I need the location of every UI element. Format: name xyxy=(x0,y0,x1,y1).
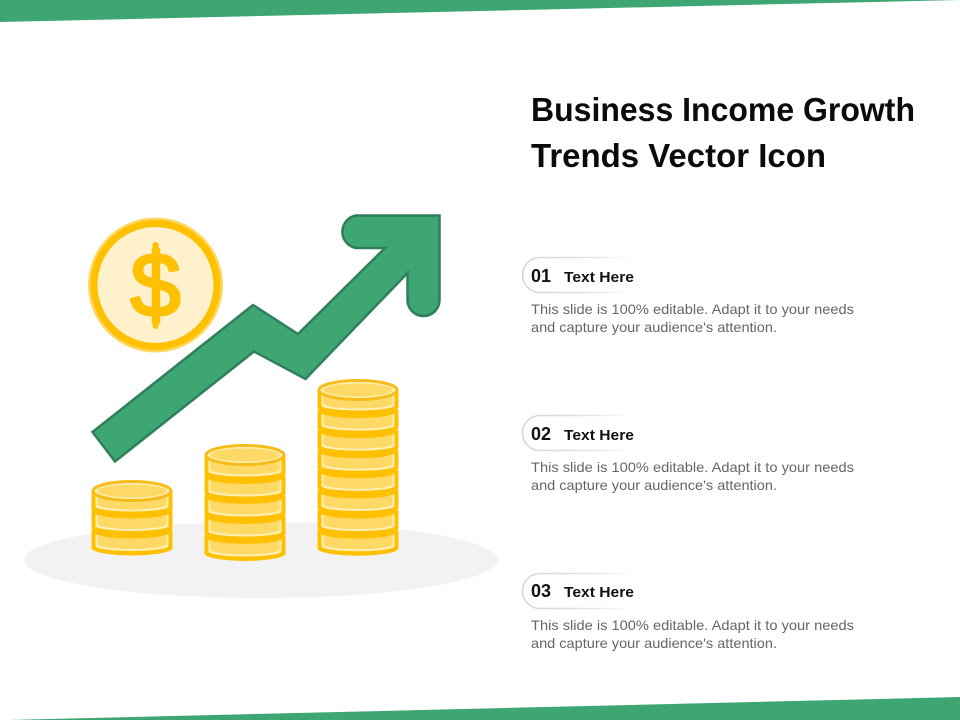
item 03: This slide is 100% editable. Adapt it to your needs xyxy=(531,617,854,633)
item 02 xyxy=(522,416,854,493)
item 01 xyxy=(523,258,854,335)
item 01: 01 xyxy=(531,266,551,286)
floor shadow xyxy=(24,522,498,598)
item 03 xyxy=(522,574,854,651)
item 02: Text Here xyxy=(564,428,634,444)
title: Business Income Growth xyxy=(531,91,915,128)
title: Trends Vector Icon xyxy=(531,137,826,174)
title xyxy=(531,91,915,174)
bottom green band xyxy=(8,697,960,720)
item 01: This slide is 100% editable. Adapt it to your needs xyxy=(531,301,854,317)
item 03: Text Here xyxy=(564,585,634,601)
item 02: 02 xyxy=(531,424,551,444)
icon: dollar coin: $ xyxy=(130,236,181,336)
item 03: and capture your audience's attention. xyxy=(531,635,777,651)
item 01: and capture your audience's attention. xyxy=(531,319,777,335)
item 01: Text Here xyxy=(564,270,634,286)
coin stack: large xyxy=(318,380,398,556)
arrow: rising trend xyxy=(92,216,440,462)
item 03: 03 xyxy=(531,581,551,601)
coin stack: medium xyxy=(204,446,286,561)
item 02: This slide is 100% editable. Adapt it to your needs xyxy=(531,459,854,475)
top green band xyxy=(0,0,960,22)
item 02: and capture your audience's attention. xyxy=(531,477,777,493)
icon: dollar coin xyxy=(88,218,223,352)
coin stack: small xyxy=(92,482,172,556)
